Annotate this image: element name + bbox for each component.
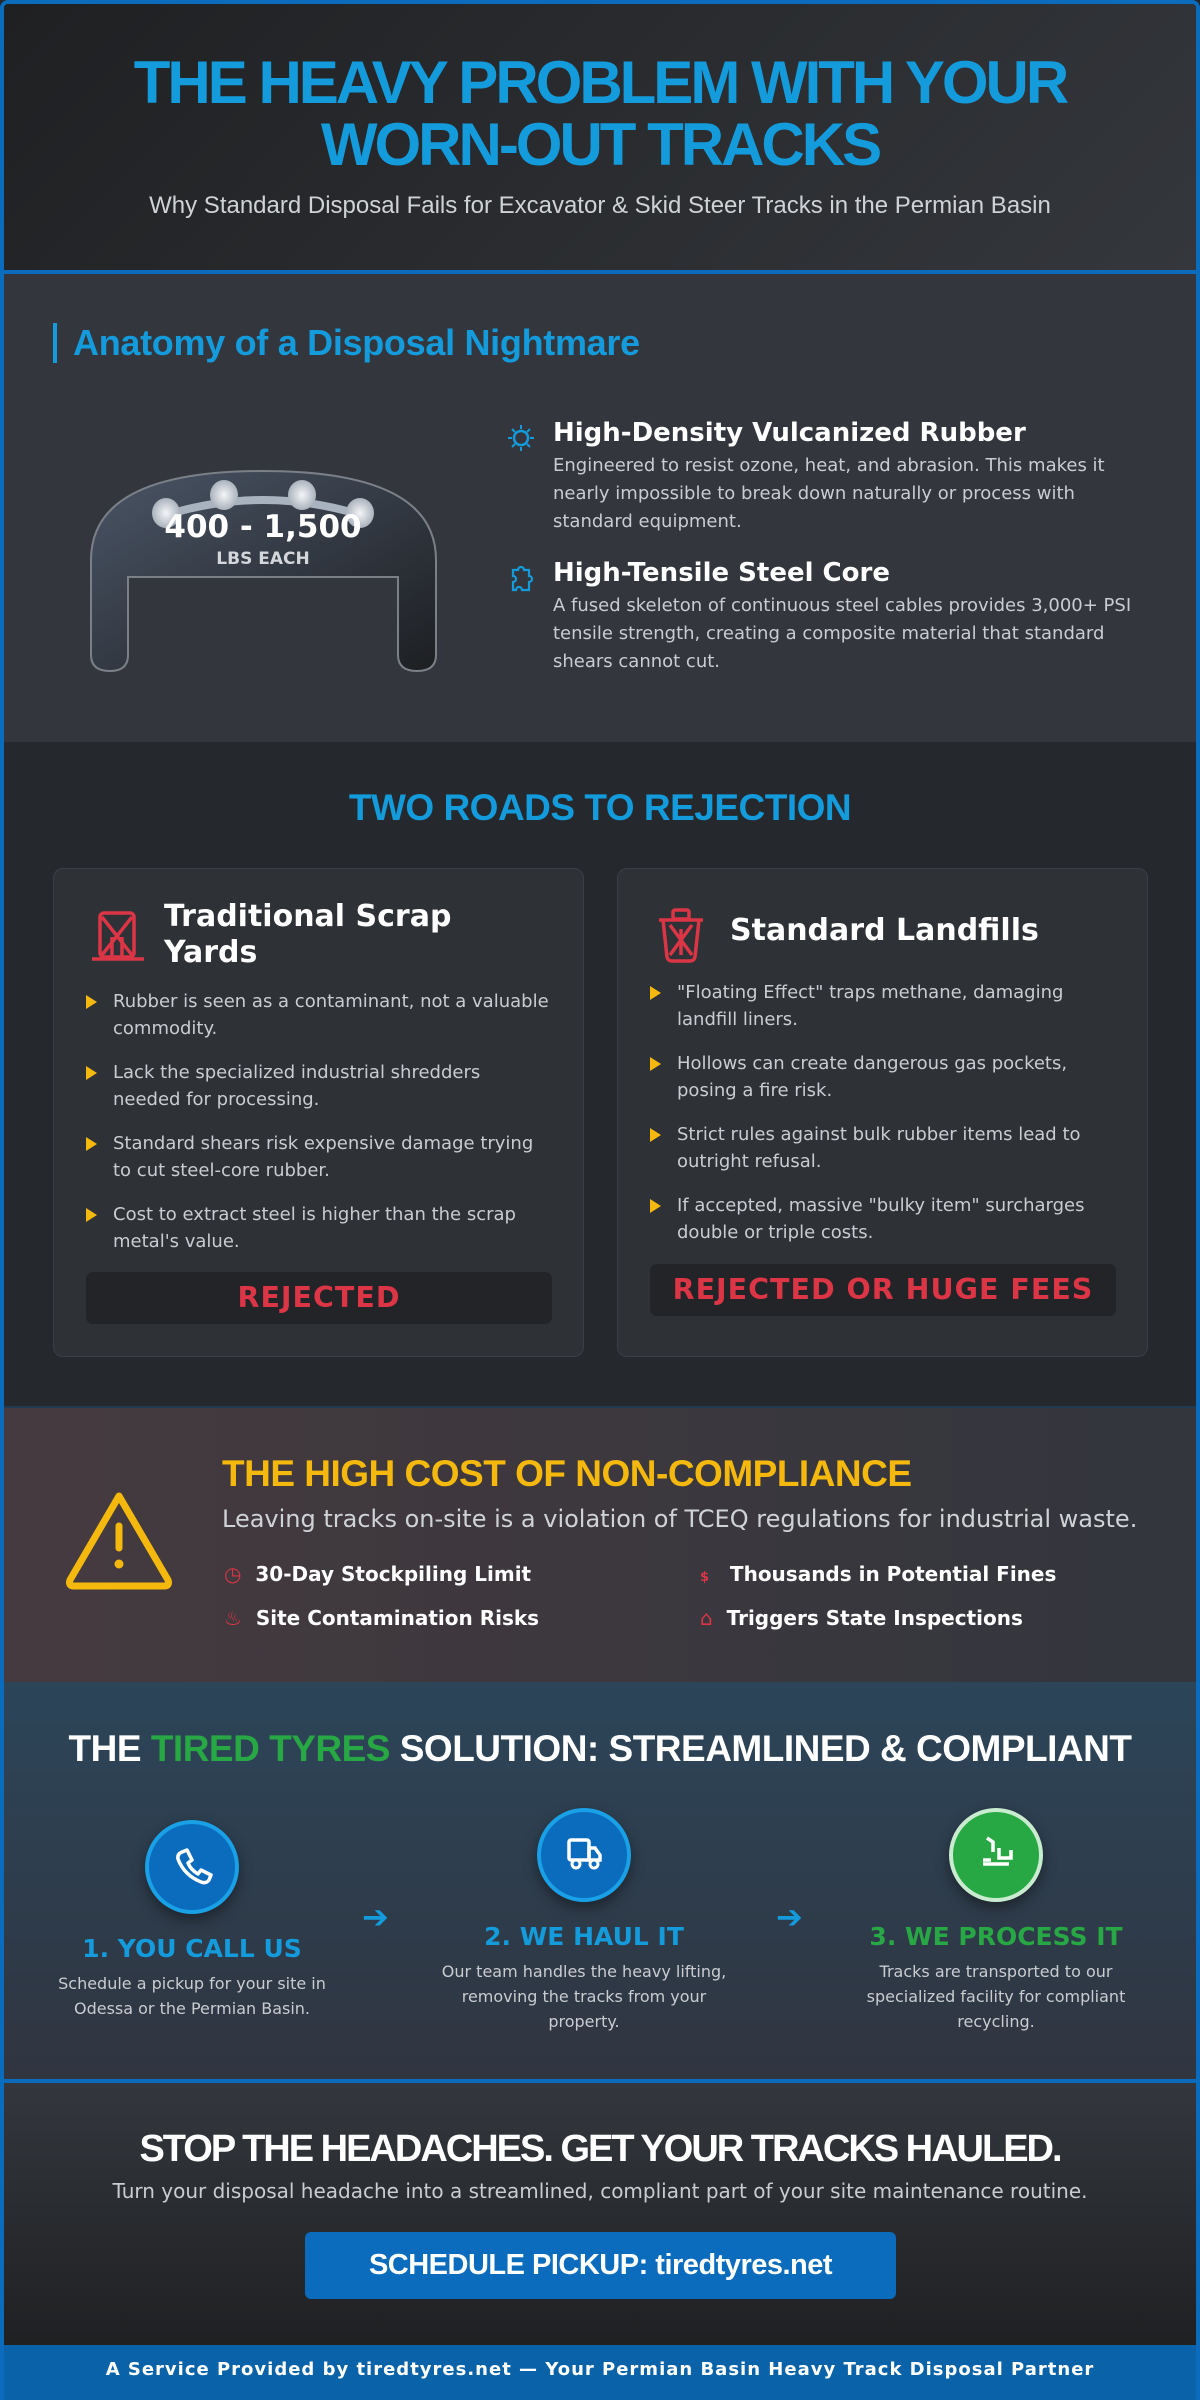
panel: call to action: [4, 2083, 1196, 2349]
panel: anatomy: [4, 274, 1196, 742]
step 2: 2. WE HAUL IT: [484, 1922, 684, 1951]
panel: anatomy: High-Density Vulcanized Rubber: [553, 418, 1026, 448]
step 1: 1. YOU CALL US: [82, 1934, 302, 1963]
step 1: [58, 1820, 326, 2018]
badge: rejected: REJECTED: [238, 1281, 400, 1314]
panel: two roads: [4, 742, 1196, 1408]
list: scrap reasons: Cost to extract steel is higher than the scrap metal's value.: [113, 1204, 516, 1252]
feature: steel: [512, 558, 1131, 672]
item: contamination: ♨ Site Contamination Risks: [224, 1606, 539, 1630]
badge: rejected: [86, 1272, 552, 1324]
title: [134, 49, 1068, 178]
text: TCEQ: Leaving tracks on-site is a violation of TCEQ regulations for industrial waste.: [222, 1505, 1137, 1533]
panel: solution: [4, 1682, 1196, 2079]
item: 30-day: ◷ 30-Day Stockpiling Limit: [224, 1562, 531, 1586]
icon: phone: [145, 1820, 239, 1914]
card: scrap yards: Yards: [164, 935, 257, 970]
list: scrap reasons: Standard shears risk expensive damage trying to cut steel-core rubber.: [113, 1133, 533, 1181]
button: schedule: SCHEDULE PICKUP: tiredtyres.net: [369, 2249, 832, 2281]
icon: scrap: [92, 911, 144, 961]
feature: rubber: [508, 418, 1105, 532]
icon: recycle: [949, 1808, 1043, 1902]
step 3: 3. WE PROCESS IT: [869, 1922, 1123, 1951]
heading: anatomy: Anatomy of a Disposal Nightmare: [73, 322, 640, 363]
card: landfills: [617, 868, 1148, 1357]
icon: puzzle: [512, 566, 534, 592]
heading: high cost: THE HIGH COST OF NON-COMPLIANCE: [222, 1453, 912, 1494]
card: landfills: Standard Landfills: [730, 913, 1039, 948]
panel: anatomy: Engineered to resist ozone, heat, and abrasion. This makes it nearly impossible to break down naturally or process with standard equipment.: [553, 455, 1105, 532]
card: scrap yards: Traditional Scrap: [164, 899, 451, 934]
panel: non-compliance: [4, 1408, 1196, 1682]
track graphic: [90, 470, 437, 672]
list: landfill reasons: Hollows can create dangerous gas pockets, posing a fire risk.: [677, 1053, 1067, 1101]
arrow 2: ➔: [776, 1898, 803, 1936]
subtitle: Why Standard Disposal Fails for Excavator & Skid Steer Tracks in the Permian Basin: [149, 192, 1051, 219]
list: landfill reasons: "Floating Effect" traps methane, damaging landfill liners.: [677, 982, 1063, 1030]
badge: rejected or fees: REJECTED OR HUGE FEES: [673, 1273, 1093, 1306]
list: landfill reasons: [650, 982, 1084, 1243]
title: WORN-OUT TRACKS: [321, 111, 879, 178]
heading: two roads: TWO ROADS TO REJECTION: [349, 787, 851, 828]
step 2: Our team handles the heavy lifting, removing the tracks from your property.: [442, 1962, 726, 2031]
list: landfill reasons: Strict rules against bulk rubber items lead to outright refusal.: [677, 1124, 1081, 1172]
title: THE HEAVY PROBLEM WITH YOUR: [134, 49, 1066, 116]
step 3: [867, 1808, 1125, 2031]
heading: stop headaches: STOP THE HEADACHES. GET YOUR TRACKS HAULED.: [139, 2128, 1061, 2170]
icon: landfill: [659, 908, 703, 963]
list: scrap reasons: Lack the specialized industrial shredders: [113, 1062, 480, 1083]
header section: [4, 4, 1196, 270]
panel: anatomy: A fused skeleton of continuous steel cables provides 3,000+ PSI tensile strength, creating a composite material that standard shears cannot cut.: [553, 595, 1131, 672]
footer: [0, 2345, 1200, 2400]
list: scrap reasons: needed for processing.: [113, 1089, 319, 1110]
icon: gear: [508, 425, 534, 451]
step 3: Tracks are transported to our specialized facility for compliant recycling.: [867, 1962, 1125, 2031]
list: scrap reasons: Rubber is seen as a contaminant, not a valuable commodity.: [113, 991, 549, 1039]
text: cta subtitle: Turn your disposal headache into a streamlined, compliant part of your site maintenance routine.: [113, 2179, 1087, 2203]
item: fines: $ Thousands in Potential Fines: [700, 1562, 1056, 1586]
track graphic: LBS EACH: [216, 549, 310, 569]
icon: warning: [66, 1492, 172, 1590]
heading: solution: THE TIRED TYRES SOLUTION: STREAMLINED & COMPLIANT: [69, 1728, 1131, 1769]
panel: anatomy: High-Tensile Steel Core: [553, 558, 890, 588]
arrow 1: ➔: [362, 1898, 389, 1936]
track graphic: 400 - 1,500: [164, 509, 362, 545]
footer: A Service Provided by tiredtyres.net — Your Permian Basin Heavy Track Disposal Partner: [106, 2359, 1094, 2380]
step 2: [442, 1808, 726, 2031]
badge: rejected or fees: [650, 1264, 1116, 1316]
item: inspections: ⌂ Triggers State Inspections: [700, 1606, 1023, 1630]
card: scrap yards: [53, 868, 584, 1357]
step 1: Schedule a pickup for your site in Odessa or the Permian Basin.: [58, 1974, 326, 2018]
icon: truck: [537, 1808, 631, 1902]
list: landfill reasons: If accepted, massive "bulky item" surcharges double or triple costs.: [677, 1195, 1084, 1243]
button: schedule: [305, 2232, 896, 2299]
list: scrap reasons: [86, 991, 549, 1252]
